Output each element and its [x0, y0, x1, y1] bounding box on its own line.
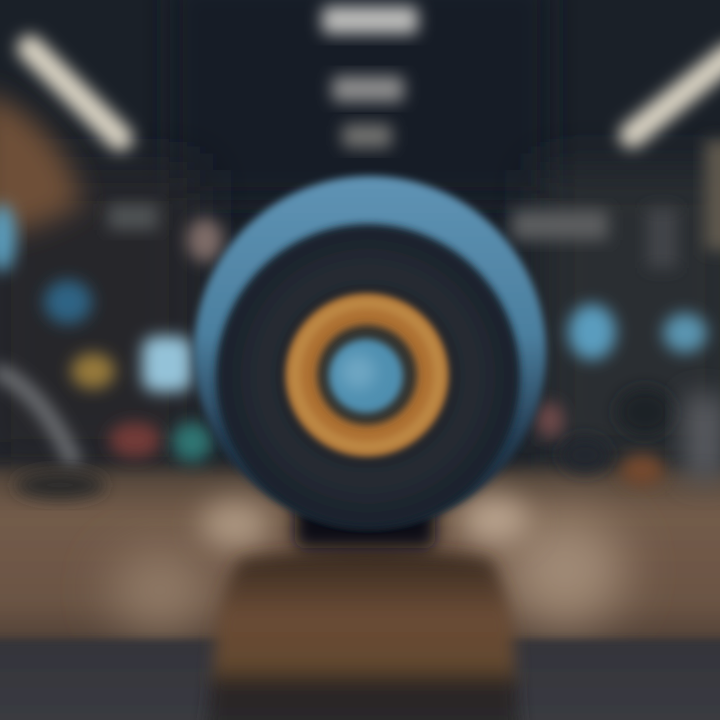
yellow disc: [71, 353, 115, 389]
orange ring dark inner: [317, 325, 417, 425]
central target: [194, 176, 546, 528]
pale blue square: [142, 336, 192, 392]
light: right diagonal: [632, 55, 720, 135]
orange ring highlight: [295, 303, 439, 447]
blue centre: [329, 339, 403, 413]
ceiling lights: [30, 6, 720, 148]
light: left diagonal: [30, 48, 120, 138]
grey curved rail: [0, 370, 75, 465]
blue disc left: [44, 280, 92, 324]
orange object: [620, 454, 664, 486]
dark base left: [15, 471, 105, 499]
pedestal neck shadow: [295, 500, 435, 548]
left wall: warm brown panel: [0, 90, 82, 240]
blue disc far right: [663, 313, 707, 353]
light: lower centre: [342, 124, 392, 148]
bottom dark band: [0, 640, 720, 720]
light: middle centre: [332, 76, 404, 102]
orange ring: [286, 294, 448, 456]
dark tyre: [216, 224, 520, 528]
blue disc right: [568, 304, 616, 360]
blue glow far left: [0, 204, 16, 272]
light: top centre: [322, 6, 418, 34]
dark objects: [617, 388, 673, 436]
background shelves and objects right: [512, 140, 720, 486]
outer blue shell: [194, 176, 546, 528]
pedestal: [205, 550, 520, 720]
floor: [0, 468, 720, 648]
red object: [109, 422, 161, 458]
teal object: [172, 422, 212, 462]
background shelves and objects left: [0, 204, 223, 499]
